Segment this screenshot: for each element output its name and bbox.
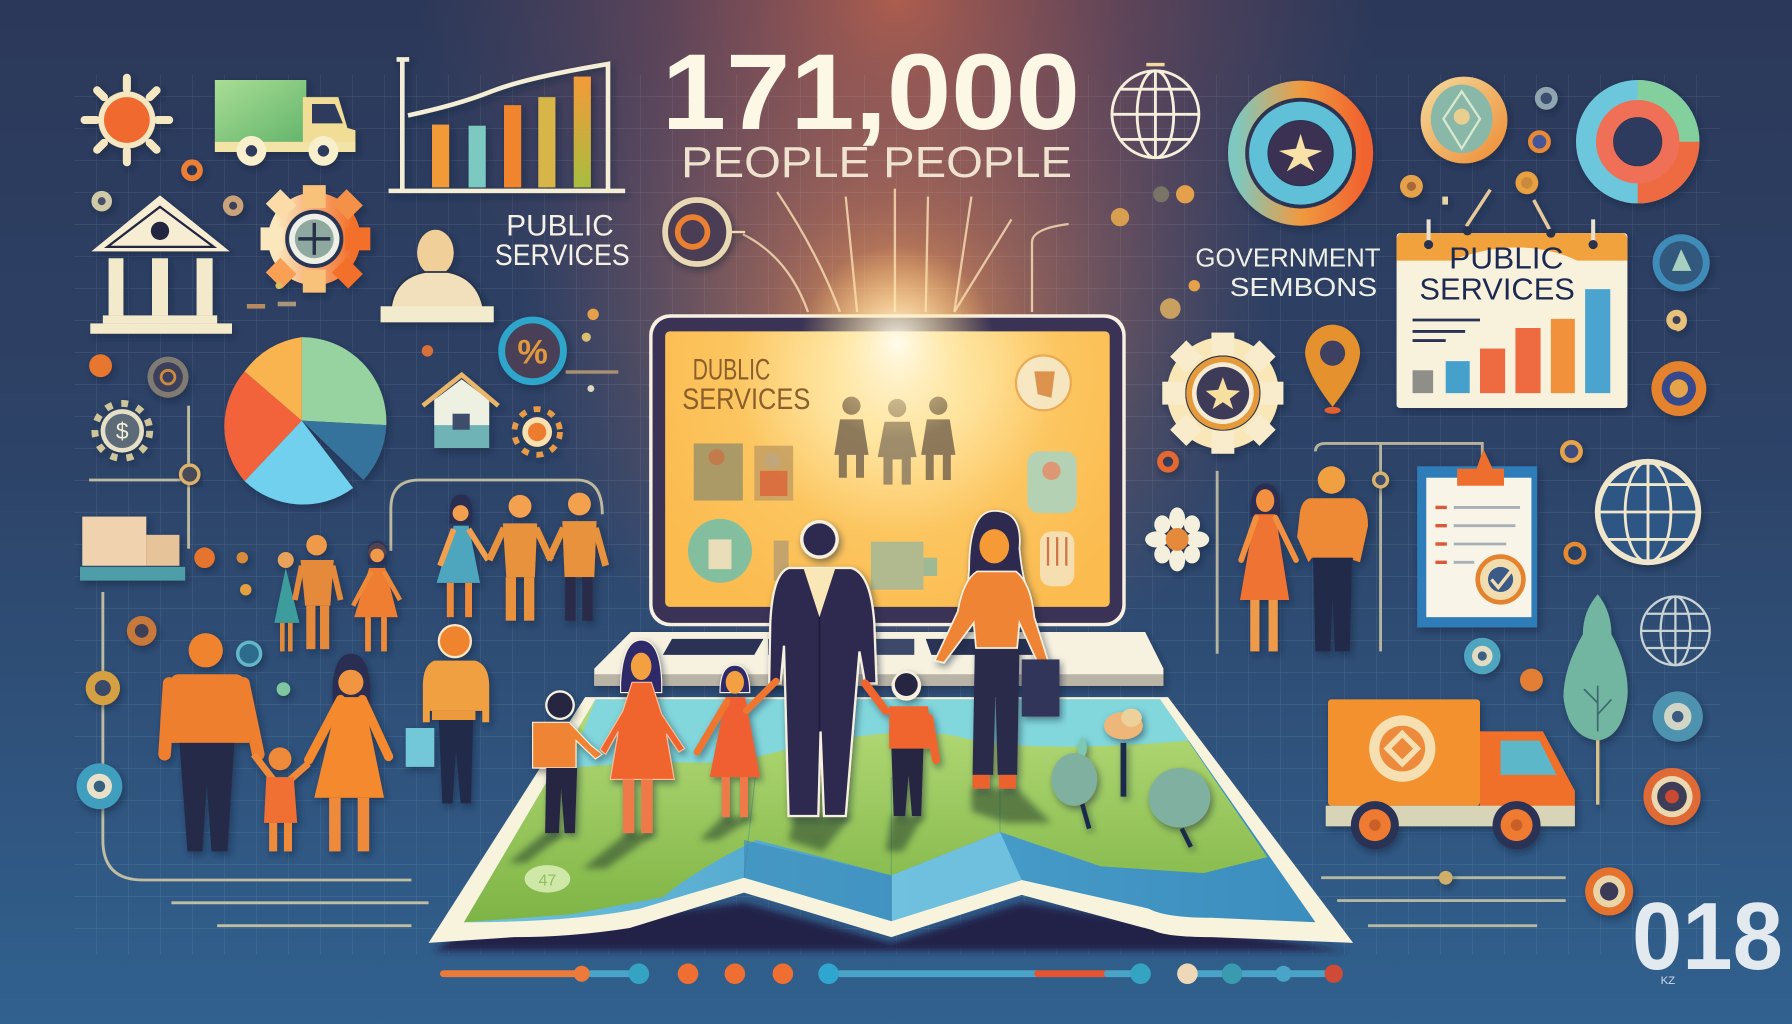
map trees xyxy=(1051,709,1210,847)
icon: orange truck xyxy=(1326,699,1575,849)
donut badge: star xyxy=(1237,89,1365,217)
screen heading: DUBLIC xyxy=(693,353,770,386)
watermark logo: KZ xyxy=(1661,975,1675,987)
icon: orange gear xyxy=(261,185,370,293)
icon: small gear with symbol xyxy=(95,403,150,458)
figure shadows on the map xyxy=(509,789,1051,869)
screen light flare xyxy=(800,246,994,440)
people group: big family left xyxy=(165,625,489,851)
icon: clipboard xyxy=(1417,449,1537,627)
icon: wire globe xyxy=(1641,597,1710,665)
title: 171,000 people: 171,000 xyxy=(662,32,1080,152)
icon: small gear with symbol: $ xyxy=(116,418,129,444)
text: public services left: PUBLIC xyxy=(506,209,614,242)
small icons top right xyxy=(1400,87,1558,205)
icon: globe right xyxy=(1598,462,1698,562)
main mother xyxy=(935,511,1048,789)
text: government label xyxy=(1195,242,1381,302)
screen heading xyxy=(682,353,810,416)
laptop base xyxy=(594,632,1163,686)
text: government label: GOVERNMENT xyxy=(1195,242,1381,272)
title: 171,000 people: PEOPLE PEOPLE xyxy=(681,139,1072,187)
couple right xyxy=(1240,466,1368,651)
child: girl small xyxy=(697,665,776,817)
icon: small sun xyxy=(514,409,560,455)
small rings right xyxy=(1160,442,1584,885)
text: public services left xyxy=(495,209,630,272)
watermark logo: 018 xyxy=(1632,883,1783,990)
text: public services left: SERVICES xyxy=(495,239,630,272)
icons right of calendar xyxy=(1651,234,1710,416)
lower right badges xyxy=(1464,638,1703,825)
ring badge with connector line xyxy=(665,200,745,264)
ring node bottom right xyxy=(1585,867,1633,915)
screen xyxy=(665,331,1110,607)
icon: tree xyxy=(1563,594,1628,805)
screen tiles xyxy=(688,355,1077,590)
small glowing dots around the monitor xyxy=(247,185,1200,392)
people group: upper trio xyxy=(437,493,606,621)
node on connector xyxy=(181,465,199,483)
screen heading: SERVICES xyxy=(682,383,810,416)
child: boy right xyxy=(865,671,936,816)
connector lines left xyxy=(89,406,602,926)
icon: blue ring badge: % xyxy=(517,333,548,371)
monitor xyxy=(649,314,1126,626)
small coins left xyxy=(89,162,243,398)
folded map xyxy=(429,697,1353,951)
icon: boxes xyxy=(80,517,185,581)
people group: middle trio xyxy=(274,535,400,651)
folded map: 47 xyxy=(539,873,556,890)
calendar card: SERVICES xyxy=(1419,271,1575,306)
connector lines right xyxy=(1217,443,1566,926)
gear: cream with star xyxy=(1162,333,1283,454)
icon: green truck xyxy=(215,80,355,166)
icon: globe top xyxy=(1112,63,1199,158)
bar chart: top left xyxy=(389,59,625,191)
child: boy left xyxy=(533,690,602,833)
icon: person at desk xyxy=(381,230,494,322)
timeline xyxy=(443,963,1343,984)
main father xyxy=(769,520,877,816)
icon: flower xyxy=(1145,507,1209,571)
calendar card: PUBLIC xyxy=(1449,241,1563,276)
text: government label: SEMBONS xyxy=(1230,272,1377,302)
light rays from the screen xyxy=(743,189,1069,312)
handbag xyxy=(1022,659,1059,717)
donut chart xyxy=(1587,80,1699,203)
calendar card xyxy=(1397,190,1627,408)
pie chart xyxy=(224,337,386,505)
icon: house xyxy=(423,375,498,448)
icon: government building xyxy=(90,195,232,334)
icon: blue ring badge xyxy=(502,320,563,382)
small icons lower left xyxy=(77,547,290,809)
child: girl in orange dress xyxy=(600,640,685,833)
icon: map pin xyxy=(1305,325,1360,414)
emblem badge xyxy=(1421,77,1507,163)
icon: sun xyxy=(85,78,169,162)
screen trio xyxy=(834,397,955,485)
